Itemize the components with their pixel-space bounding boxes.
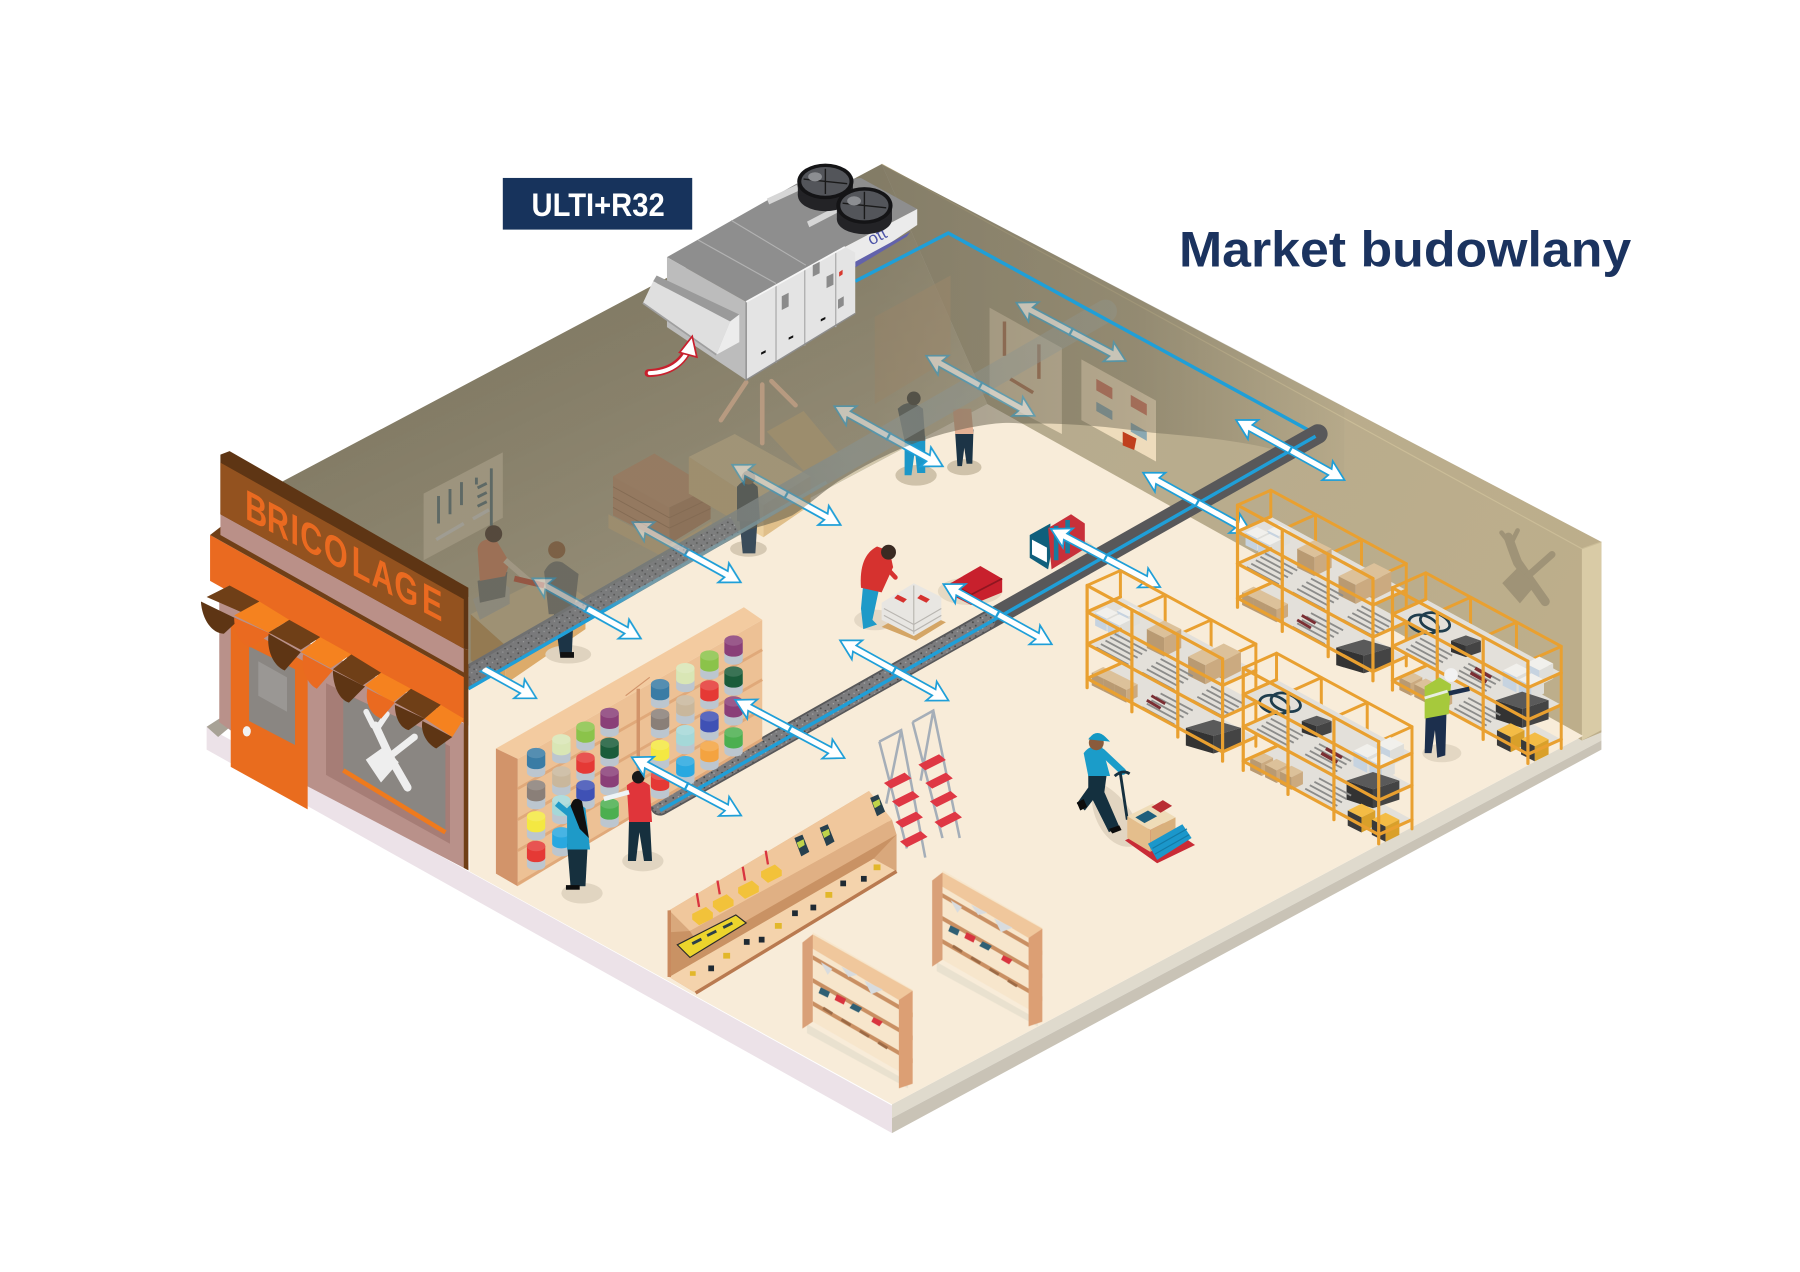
display gondola — [669, 791, 897, 993]
ladders — [879, 711, 962, 858]
sign board — [220, 451, 468, 650]
floor slab — [207, 727, 1601, 1133]
low tool shelf left — [802, 932, 913, 1088]
drills — [794, 794, 885, 856]
blue return line at the ceiling — [855, 233, 1316, 434]
icon: wrench and spatula on the right wall — [1502, 530, 1552, 602]
orange fascia — [210, 535, 468, 726]
front panels — [746, 247, 855, 380]
pink band — [220, 512, 468, 675]
pegboards on the walls — [424, 276, 1156, 560]
person: worker with pallet jack — [1077, 733, 1195, 863]
pallet load — [1125, 800, 1195, 863]
condenser fan 1 — [797, 164, 854, 211]
rack near wall — [1392, 573, 1561, 763]
timber stacks — [689, 411, 838, 537]
person: woman in blue top — [557, 799, 603, 903]
title: Market budowlany — [1179, 220, 1631, 277]
rollers — [692, 851, 782, 925]
rack front — [1243, 653, 1412, 844]
front air duct — [660, 434, 1318, 810]
storefront — [201, 451, 468, 870]
jerrycans — [1030, 514, 1095, 569]
rack near duct — [1087, 571, 1256, 761]
red tool box — [938, 566, 1002, 605]
right back wall — [882, 164, 1601, 740]
low tool shelf right — [932, 870, 1042, 1026]
left back wall — [281, 164, 987, 680]
person: warehouse worker in back — [730, 471, 767, 557]
facade — [219, 597, 468, 870]
person: worker in hi-vis vest — [1422, 668, 1469, 762]
unit logo: ott — [864, 222, 890, 249]
supply arrows along the front duct — [627, 410, 1350, 825]
support legs — [721, 381, 796, 443]
person: staff in red vest — [604, 771, 664, 871]
back air duct — [468, 311, 1105, 689]
illustration: isometric building supplies market — [201, 164, 1631, 1133]
window — [326, 683, 450, 844]
air handling unit ULTI+R32 — [643, 164, 917, 443]
ULTI+R32 label — [503, 178, 692, 230]
floor — [470, 404, 1583, 1104]
hood — [653, 276, 739, 321]
left face — [667, 257, 746, 380]
base step — [207, 719, 232, 737]
person: customer at the counter — [514, 541, 591, 664]
ULTI+R32 label: ULTI+R32 — [532, 187, 665, 223]
person: red shirt staff inspecting bags — [854, 545, 896, 630]
orange storage racks, back row — [1238, 490, 1406, 681]
supply arrows along the back duct, faded zone — [527, 293, 1131, 648]
person: cashier — [478, 525, 530, 603]
supply arrows along the back duct, bright zone — [478, 444, 944, 700]
person: back worker in blue trousers — [895, 391, 937, 486]
paint shelves — [496, 607, 762, 886]
spirit level — [677, 915, 746, 957]
paint cans — [527, 635, 743, 870]
arrow: air intake — [649, 336, 697, 373]
door — [231, 620, 308, 809]
stacked bags on pallet — [882, 583, 946, 641]
icon: crossed wrench and spatula — [366, 712, 414, 788]
side strip with logo — [845, 209, 917, 267]
condenser fan 2 — [836, 187, 893, 234]
sales counter — [471, 574, 585, 684]
person: back worker dark trousers — [947, 409, 982, 475]
sign text: BRICOLAGE — [245, 481, 442, 632]
awning — [201, 585, 464, 749]
unit top deck — [667, 178, 917, 302]
shadow overlay: conditioned zone boundary — [281, 164, 1344, 677]
store right edge — [464, 649, 468, 870]
brick pallet — [608, 453, 712, 560]
tape measures and tools — [690, 864, 880, 976]
